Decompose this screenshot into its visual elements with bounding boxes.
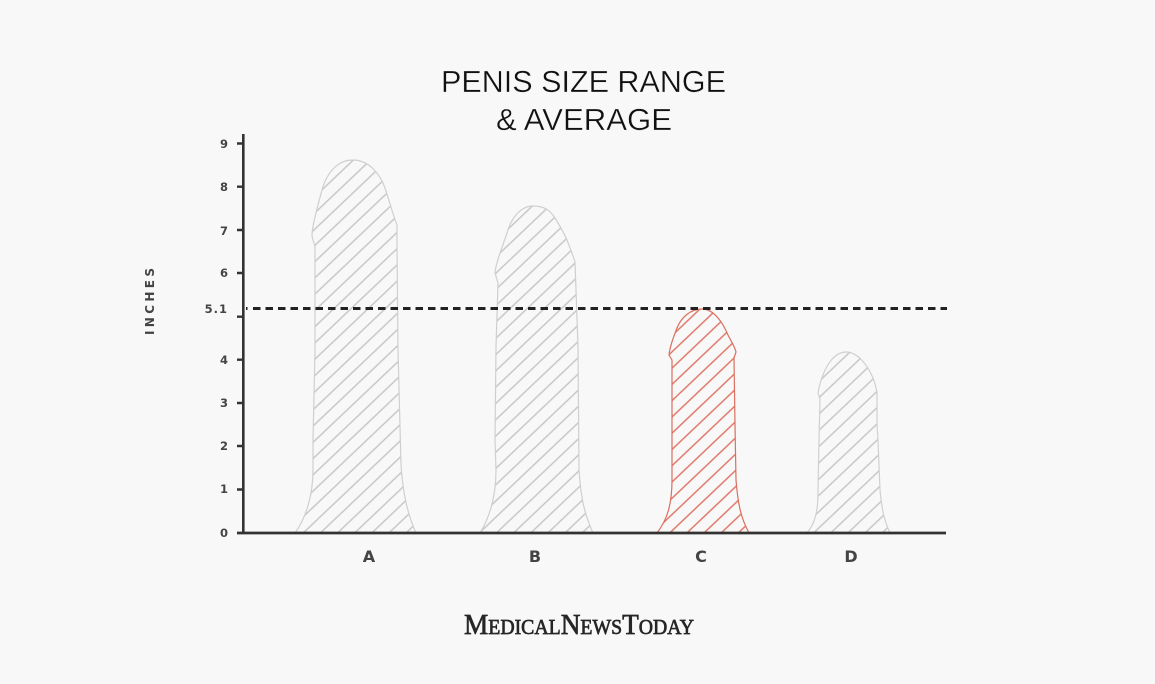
y axis tick labels: 7 <box>220 224 228 238</box>
x axis category labels: D <box>844 547 858 566</box>
x axis category labels: B <box>529 547 541 566</box>
y axis tick labels: 9 <box>220 137 228 151</box>
y axis title: INCHES <box>143 268 157 335</box>
title: PENIS SIZE RANGE <box>441 64 726 99</box>
x axis category labels: A <box>363 547 376 566</box>
y axis tick labels: 2 <box>220 439 228 453</box>
shape A <box>295 160 416 533</box>
shape C, average, highlighted <box>657 309 749 533</box>
y axis tick labels: 6 <box>220 266 228 280</box>
y axis tick labels: 1 <box>220 482 228 496</box>
shape D <box>807 352 890 533</box>
x axis category labels <box>363 547 858 566</box>
logo: Medical News Today: MEDICALNEWSTODAY <box>464 609 694 641</box>
y axis tick labels: 8 <box>220 180 228 194</box>
y axis tick labels: 3 <box>220 396 228 410</box>
x axis category labels: C <box>695 547 707 566</box>
title <box>441 64 726 137</box>
title: & AVERAGE <box>496 102 672 137</box>
x and y axes with ticks <box>237 134 946 534</box>
average dashed line at 5.1 inches <box>246 307 947 310</box>
y axis tick labels: 0 <box>220 526 228 540</box>
y axis tick labels: 4 <box>220 353 228 367</box>
y axis tick labels: 5.1 <box>205 302 228 316</box>
shape B <box>480 206 593 533</box>
y axis tick labels <box>205 137 228 540</box>
